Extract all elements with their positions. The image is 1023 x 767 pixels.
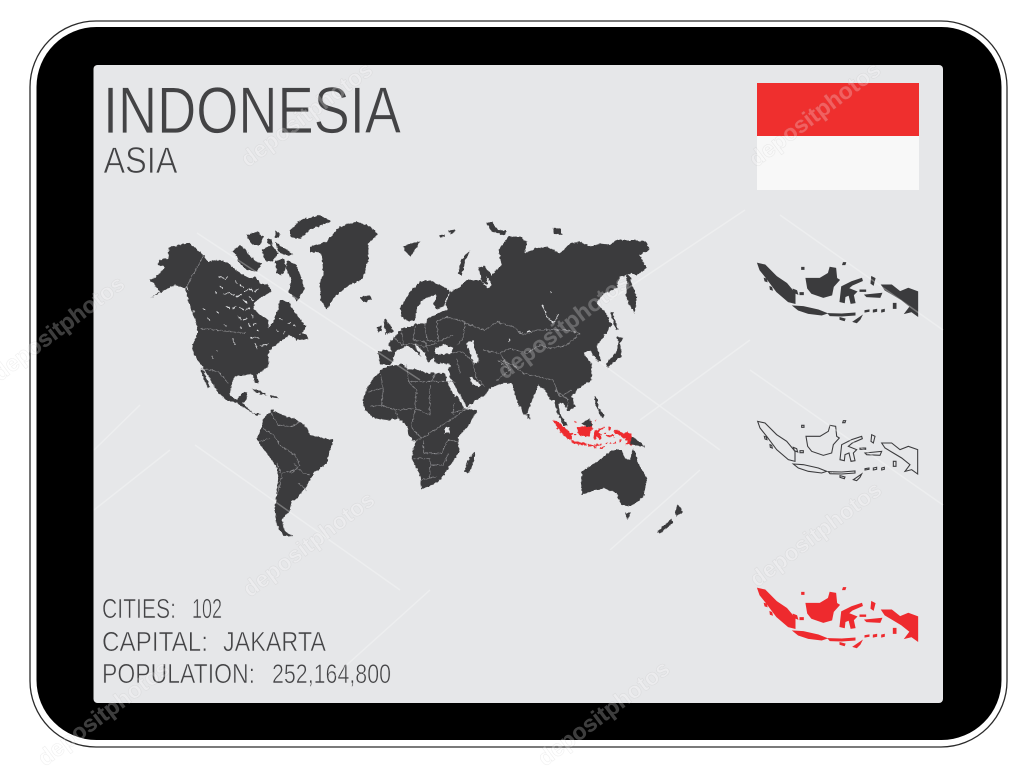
population stat: 252,164,800 [272, 659, 391, 689]
stock photo watermarks: depositphotos [235, 56, 378, 172]
lake victoria [444, 427, 449, 433]
screen panel [94, 65, 943, 703]
new zealand [657, 518, 673, 533]
indonesia silhouette: filled dark [758, 263, 918, 323]
population stat: POPULATION: [102, 658, 255, 689]
british isles [383, 318, 393, 335]
inland lakes [508, 292, 558, 342]
indonesia highlighted [553, 420, 632, 449]
greenland and south america [252, 222, 378, 537]
sri lanka [527, 414, 530, 419]
cities stat: 102 [192, 593, 222, 624]
sea cut-outs [435, 341, 482, 397]
stock photo watermarks: depositphotos [492, 268, 635, 384]
statistics text block [102, 593, 391, 689]
iceland [360, 295, 372, 303]
borders: north america [185, 256, 245, 383]
stock photo watermarks: depositphotos [237, 486, 380, 602]
flag of Indonesia [757, 83, 919, 190]
stock photo watermarks: depositphotos [744, 476, 887, 592]
madagascar [464, 452, 475, 473]
borders: africa europe asia [368, 365, 470, 480]
greenland [310, 222, 378, 309]
canada lakes specks [187, 277, 295, 358]
africa [363, 364, 477, 489]
title: INDONESIA [103, 73, 401, 147]
capital stat [102, 626, 326, 657]
eurasia [378, 237, 649, 427]
arctic russia islands [458, 251, 471, 276]
indonesia silhouette: filled red [758, 588, 918, 648]
world map [150, 215, 683, 537]
north america and arctic [150, 215, 331, 416]
baja california [201, 370, 211, 388]
borders: south america [258, 412, 310, 495]
population stat [102, 658, 391, 689]
subtitle: continent: ASIA [104, 140, 178, 181]
cities stat: CITIES: [102, 593, 176, 624]
north america mainland [150, 243, 308, 416]
arctic islands [232, 215, 331, 339]
caribbean islands [252, 389, 267, 395]
capital stat: JAKARTA [223, 626, 326, 657]
great lakes [251, 336, 291, 351]
south america [257, 410, 333, 537]
capital stat: CAPITAL: [102, 626, 208, 657]
indonesia silhouette: outline [758, 421, 918, 481]
eurasia africa oceania [363, 222, 683, 533]
russia far east islands [626, 275, 637, 313]
philippines [594, 397, 605, 419]
malay sumatra and png dark [558, 413, 568, 426]
tasmania [625, 513, 631, 519]
australia [582, 448, 647, 506]
stock photo watermarks: depositphotos [743, 56, 886, 172]
scandinavia [400, 280, 450, 322]
